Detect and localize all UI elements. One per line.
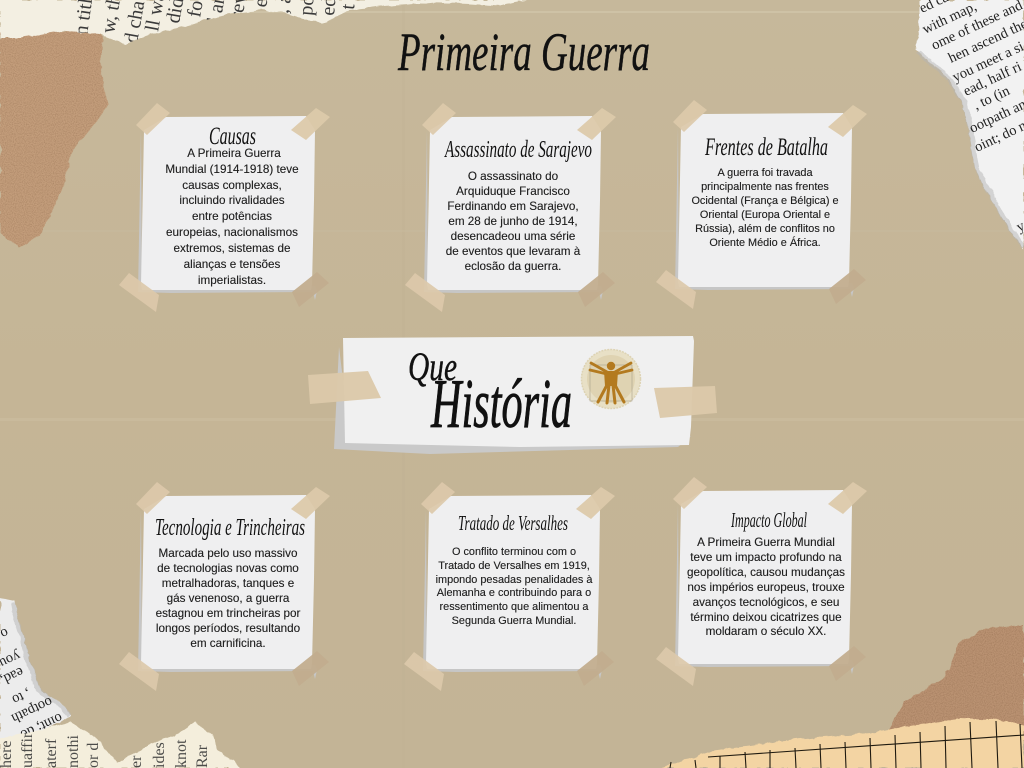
tape: banner right — [654, 386, 717, 418]
text: Assassinato body: em 28 de junho de 1914, — [448, 215, 578, 228]
text: Tecnologia body: em carnificina. — [190, 637, 266, 650]
text: Assassinato body: Ferdinando em Sarajevo, — [447, 200, 579, 213]
text: Assassinato body: Arquiduque Francisco — [456, 185, 570, 198]
text: Impacto body — [687, 536, 845, 638]
text: Tratado body: ressentimento que alimentou a — [440, 601, 589, 613]
torn book page: bottom left: , to — [10, 685, 33, 708]
heading: Impacto Global: Impacto Global — [730, 508, 807, 532]
grid paper: bottom right — [660, 718, 1024, 768]
torn book page: bottom edge: nothi — [65, 735, 82, 768]
text: Tratado body: O conflito terminou com o — [452, 546, 576, 558]
torn kraft scrap: top left — [0, 30, 108, 248]
text: Tecnologia body: estagnou em trincheiras por — [156, 607, 301, 620]
panel: Tratado de Versalhes — [404, 482, 615, 691]
text: Tecnologia body — [156, 547, 301, 650]
text: Tratado body — [436, 546, 593, 627]
text: Impacto body: geopolítica, causou mudanças — [687, 566, 845, 579]
text: Tratado body: impondo pesadas penalidades à — [436, 574, 593, 586]
panel: Frentes de Batalha — [656, 100, 867, 309]
torn book page: bottom edge: ides — [151, 742, 168, 768]
text: Tratado body: Segunda Guerra Mundial. — [452, 615, 576, 627]
torn book page: bottom edge: Rar — [194, 744, 211, 768]
text: Tecnologia body: gás venenoso, a guerra — [167, 592, 290, 605]
text: Assassinato body: O assassinato do — [468, 170, 559, 183]
text: Causas body: extremos, sistemas de — [174, 242, 290, 255]
text: Frentes body: A guerra foi travada — [717, 167, 813, 179]
torn book page: top edge: t — [337, 3, 360, 10]
text: Tratado body: Alemanha e contribuindo para o — [437, 587, 591, 599]
heading: Tratado de Versalhes: Tratado de Versalhes — [458, 511, 568, 535]
text: Frentes body: Ocidental (França e Bélgica) e — [691, 195, 839, 207]
torn book page: top edge: d cha — [120, 0, 149, 45]
heading: História: História — [430, 366, 572, 443]
text: Impacto body: término deixou cicatrizes que — [690, 611, 842, 624]
text: Causas body: causas complexas, — [182, 179, 282, 192]
torn book page: bottom edge: uaffir — [19, 732, 36, 768]
text: Causas body: A Primeira Guerra — [187, 147, 281, 160]
torn book page: top right — [916, 0, 1024, 250]
text: Assassinato body: eclosão da guerra. — [465, 260, 561, 273]
tape: banner left — [308, 371, 381, 404]
torn book page: bottom edge — [0, 722, 240, 768]
text: Frentes body: Oriente Médio e África. — [709, 236, 821, 249]
text: Tecnologia body: metralhadoras, tanques e — [162, 577, 294, 590]
text: Impacto body: nos impérios europeus, trouxe — [687, 581, 845, 594]
panel: central banner — [308, 336, 717, 454]
torn book page: bottom left: ootpath — [8, 693, 55, 727]
text: Causas body: incluindo rivalidades — [179, 194, 285, 207]
torn book page: bottom left: oint; do — [18, 709, 65, 743]
text: Impacto body: avanços tecnológicos, e seu — [693, 596, 839, 609]
text: Tratado body: Tratado de Versalhes em 1919, — [438, 560, 590, 572]
torn book page: top right: ead, half ri — [961, 59, 1024, 100]
torn book page: bottom edge: er — [128, 755, 145, 768]
panel: Impacto Global — [656, 477, 867, 686]
panel: Assassinato de Sarajevo — [405, 103, 616, 312]
text: Assassinato body: desencadeou uma série — [451, 230, 575, 243]
torn book page: top right: , to (in — [971, 83, 1013, 114]
text: Causas body: alianças e tensões — [184, 258, 281, 271]
heading: Que: Que — [408, 344, 457, 389]
torn kraft scrap: bottom right — [885, 625, 1024, 740]
panel: Tecnologia e Trincheiras — [119, 482, 330, 691]
text: Assassinato body — [446, 170, 581, 273]
torn book page: bottom left — [0, 598, 72, 746]
icon: Vitruvian man — [582, 350, 640, 408]
text: Frentes body: principalmente nas frentes — [701, 181, 829, 193]
text: Causas body: imperialistas. — [198, 274, 266, 287]
torn book page: bottom edge: aterf — [43, 738, 60, 768]
text: Impacto body: moldaram o século XX. — [706, 625, 826, 638]
torn book page: top edge — [0, 0, 526, 45]
heading: Tecnologia e Trincheiras: Tecnologia e Trincheiras — [155, 515, 305, 541]
text: Frentes body: Oriental (Europa Oriental e — [700, 209, 830, 221]
text: Frentes body: Rússia), além de conflitos no — [695, 223, 835, 235]
panel: Causas — [119, 103, 330, 312]
text: Tecnologia body: longos períodos, resultando — [156, 622, 301, 635]
text: Impacto body: A Primeira Guerra Mundial — [697, 536, 835, 549]
heading: Assassinato de Sarajevo: Assassinato de Sarajevo — [444, 137, 592, 163]
text: Impacto body: teve um impacto profundo na — [690, 551, 842, 564]
text: Tecnologia body: de tecnologias novas como — [157, 562, 299, 575]
torn book page: bottom edge: or d — [85, 743, 102, 768]
text: Causas body — [165, 147, 299, 287]
text: Frentes body — [691, 167, 839, 249]
text: Causas body: europeias, nacionalismos — [166, 226, 298, 239]
text: Assassinato body: de eventos que levaram à — [446, 245, 581, 258]
text: Tecnologia body: Marcada pelo uso massivo — [158, 547, 298, 560]
torn book page: bottom edge: knot — [173, 739, 190, 768]
title: Primeira Guerra — [397, 22, 650, 82]
text: Causas body: entre potências — [192, 210, 272, 223]
heading: Frentes de Batalha: Frentes de Batalha — [704, 134, 828, 161]
heading: Causas: Causas — [209, 123, 256, 150]
text: Causas body: Mundial (1914-1918) teve — [165, 163, 299, 176]
